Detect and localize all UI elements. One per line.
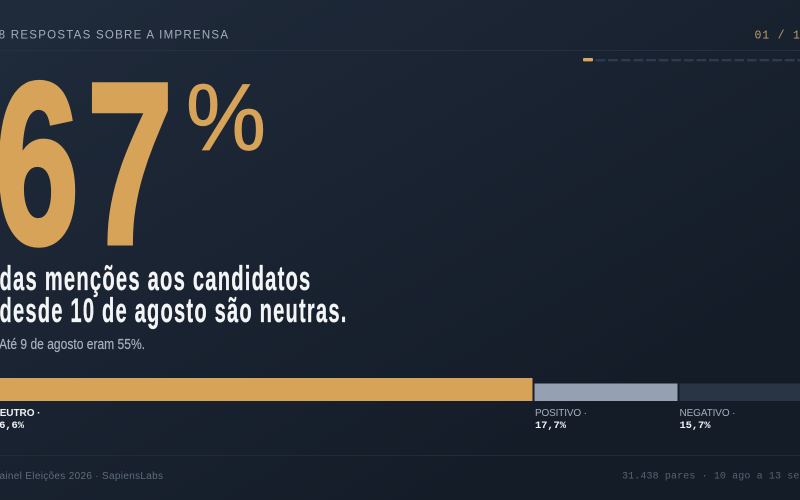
headline [0,260,348,330]
legend: negativo: 15,7% [680,420,711,432]
legend: positivo: POSITIVO · [535,408,587,419]
headline: das menções aos candidatos [0,260,312,298]
legend: negativo [680,408,736,432]
headline: desde 10 de agosto são neutras. [0,292,348,330]
legend: neutro [0,408,40,432]
legend: negativo: NEGATIVO · [680,408,736,419]
legend: positivo [535,408,587,432]
subheading: Até 9 de agosto eram 55%. [0,336,145,353]
big number 67: 7 [87,35,173,292]
legend: positivo: 17,7% [535,420,567,432]
percent sign: % [186,65,266,171]
progress segments [583,58,800,61]
stacked bar [0,378,800,401]
